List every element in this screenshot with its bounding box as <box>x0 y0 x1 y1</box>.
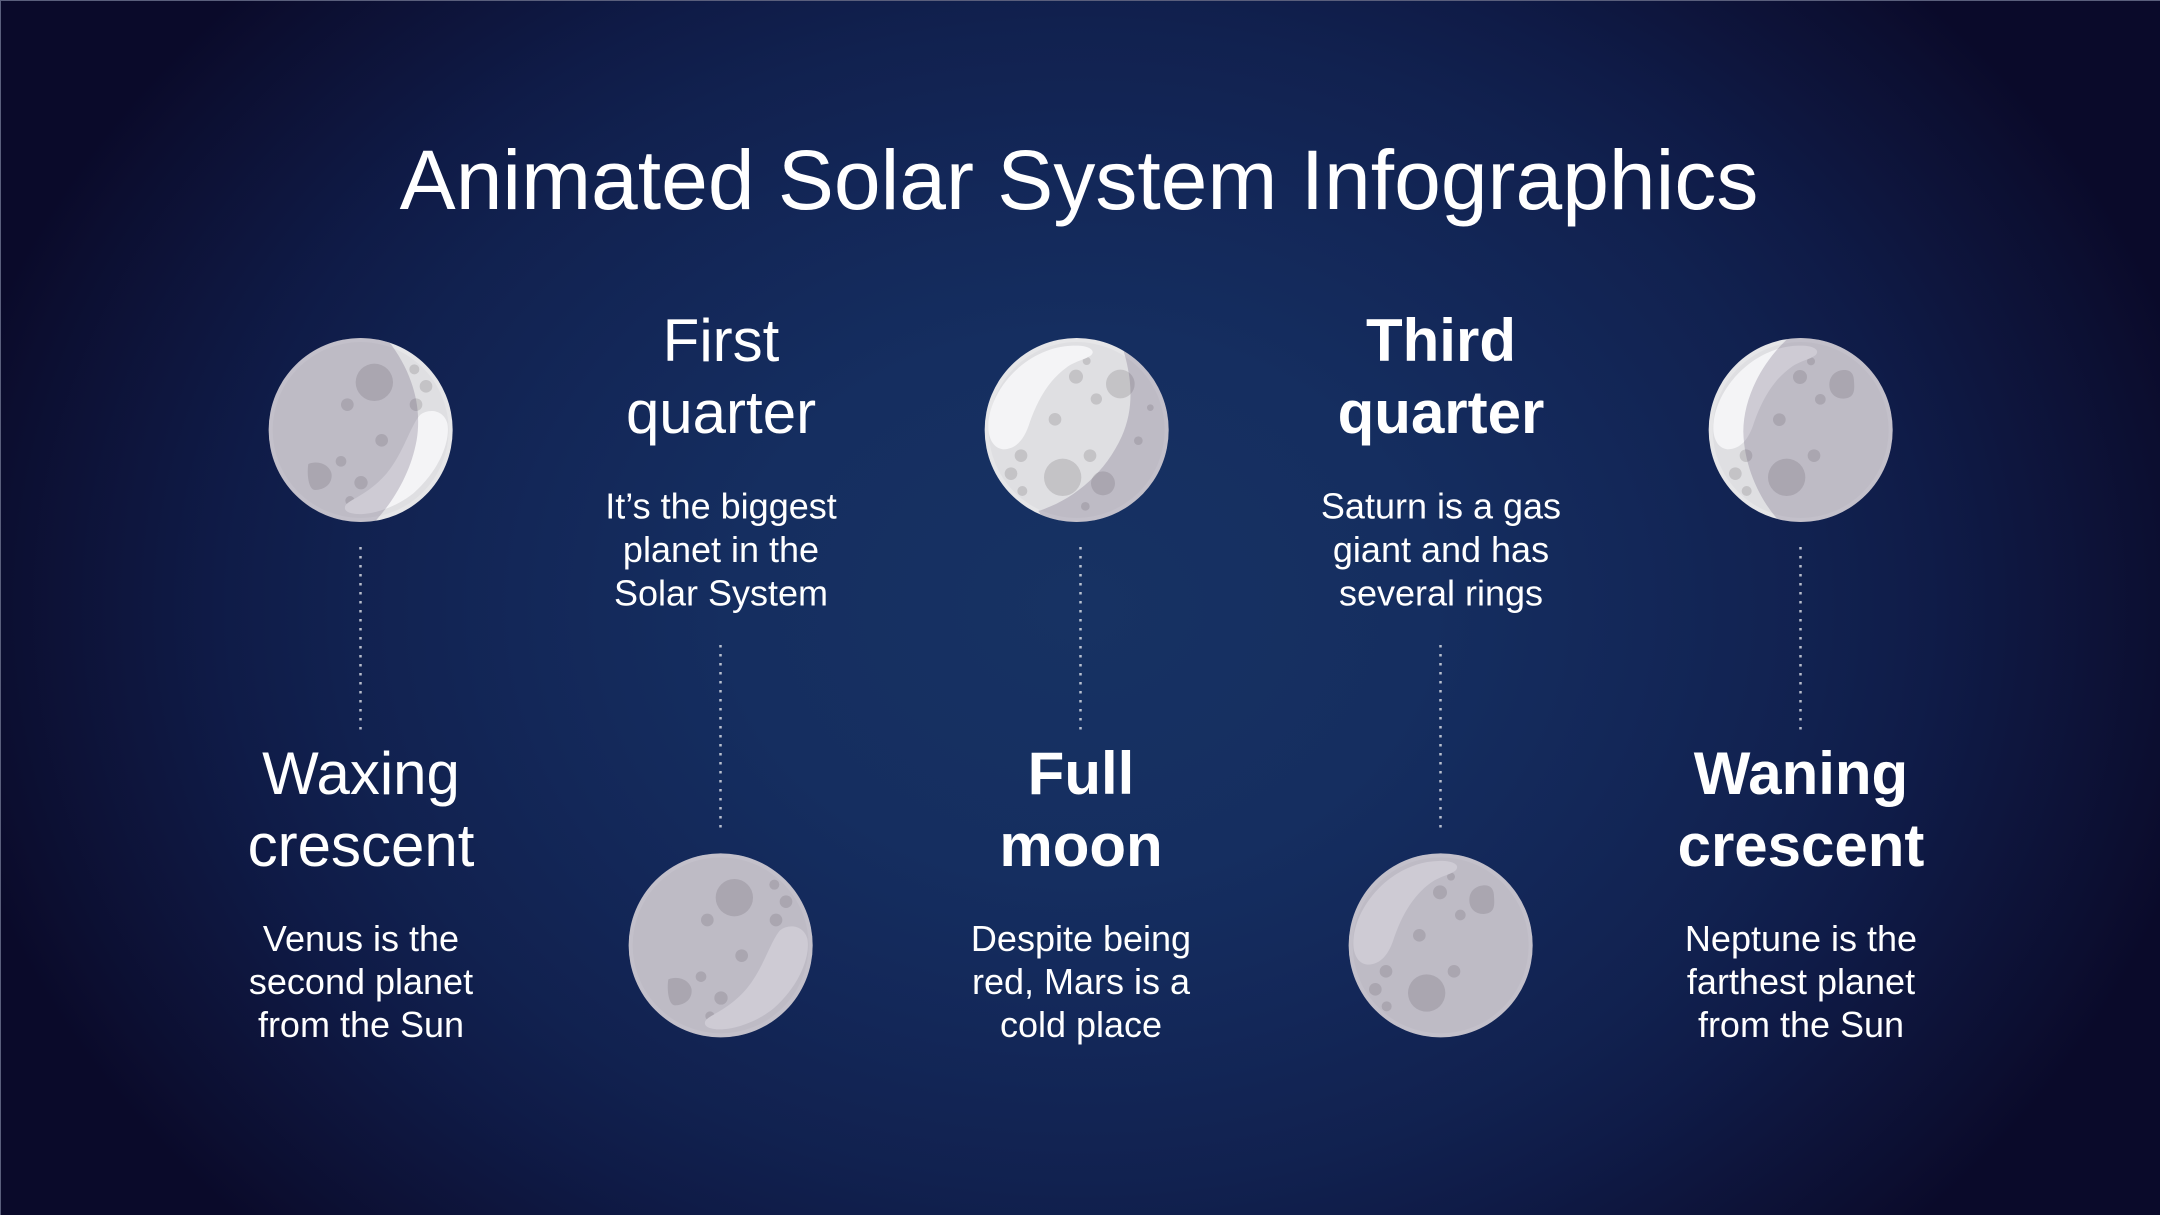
text: waxing crescent: from the Sun <box>258 1004 464 1045</box>
text: full moon: Despite being <box>971 918 1191 959</box>
heading: third quarter: Third <box>1366 307 1516 374</box>
heading: third quarter: quarter <box>1338 379 1544 446</box>
heading: full moon: moon <box>999 812 1163 879</box>
connector: waning crescent <box>1799 547 1802 730</box>
connector: waxing crescent <box>359 547 362 730</box>
heading: full moon: Full <box>1028 740 1134 807</box>
text: third quarter: giant and has <box>1333 529 1549 570</box>
text: waning crescent: farthest planet <box>1687 961 1915 1002</box>
moon: third quarter <box>1349 853 1533 1037</box>
text: third quarter: Saturn is a gas <box>1321 486 1561 527</box>
connector: first quarter <box>719 645 722 828</box>
text: waxing crescent: second planet <box>249 961 473 1002</box>
heading: first quarter: quarter <box>626 379 816 446</box>
text: third quarter: several rings <box>1339 572 1543 613</box>
heading: waxing crescent: crescent <box>248 812 475 879</box>
moon: waxing crescent <box>260 337 453 523</box>
connector: full moon <box>1079 547 1082 730</box>
heading: first quarter: First <box>663 307 780 374</box>
text: first quarter: Solar System <box>614 572 828 613</box>
text: full moon: red, Mars is a <box>972 961 1191 1002</box>
connector: third quarter <box>1439 645 1442 828</box>
text: first quarter: planet in the <box>623 529 819 570</box>
moon: full moon <box>984 338 1169 522</box>
moon: waning crescent <box>1709 337 1900 530</box>
heading: waning crescent: Waning <box>1694 740 1908 807</box>
heading: waxing crescent: Waxing <box>262 740 460 807</box>
title: Animated Solar System Infographics <box>400 133 1758 227</box>
moon: first quarter <box>629 853 813 1037</box>
text: full moon: cold place <box>1000 1004 1162 1045</box>
text: waxing crescent: Venus is the <box>263 918 459 959</box>
text: first quarter: It’s the biggest <box>605 486 837 527</box>
heading: waning crescent: crescent <box>1678 812 1924 879</box>
text: waning crescent: from the Sun <box>1698 1004 1904 1045</box>
text: waning crescent: Neptune is the <box>1685 918 1917 959</box>
